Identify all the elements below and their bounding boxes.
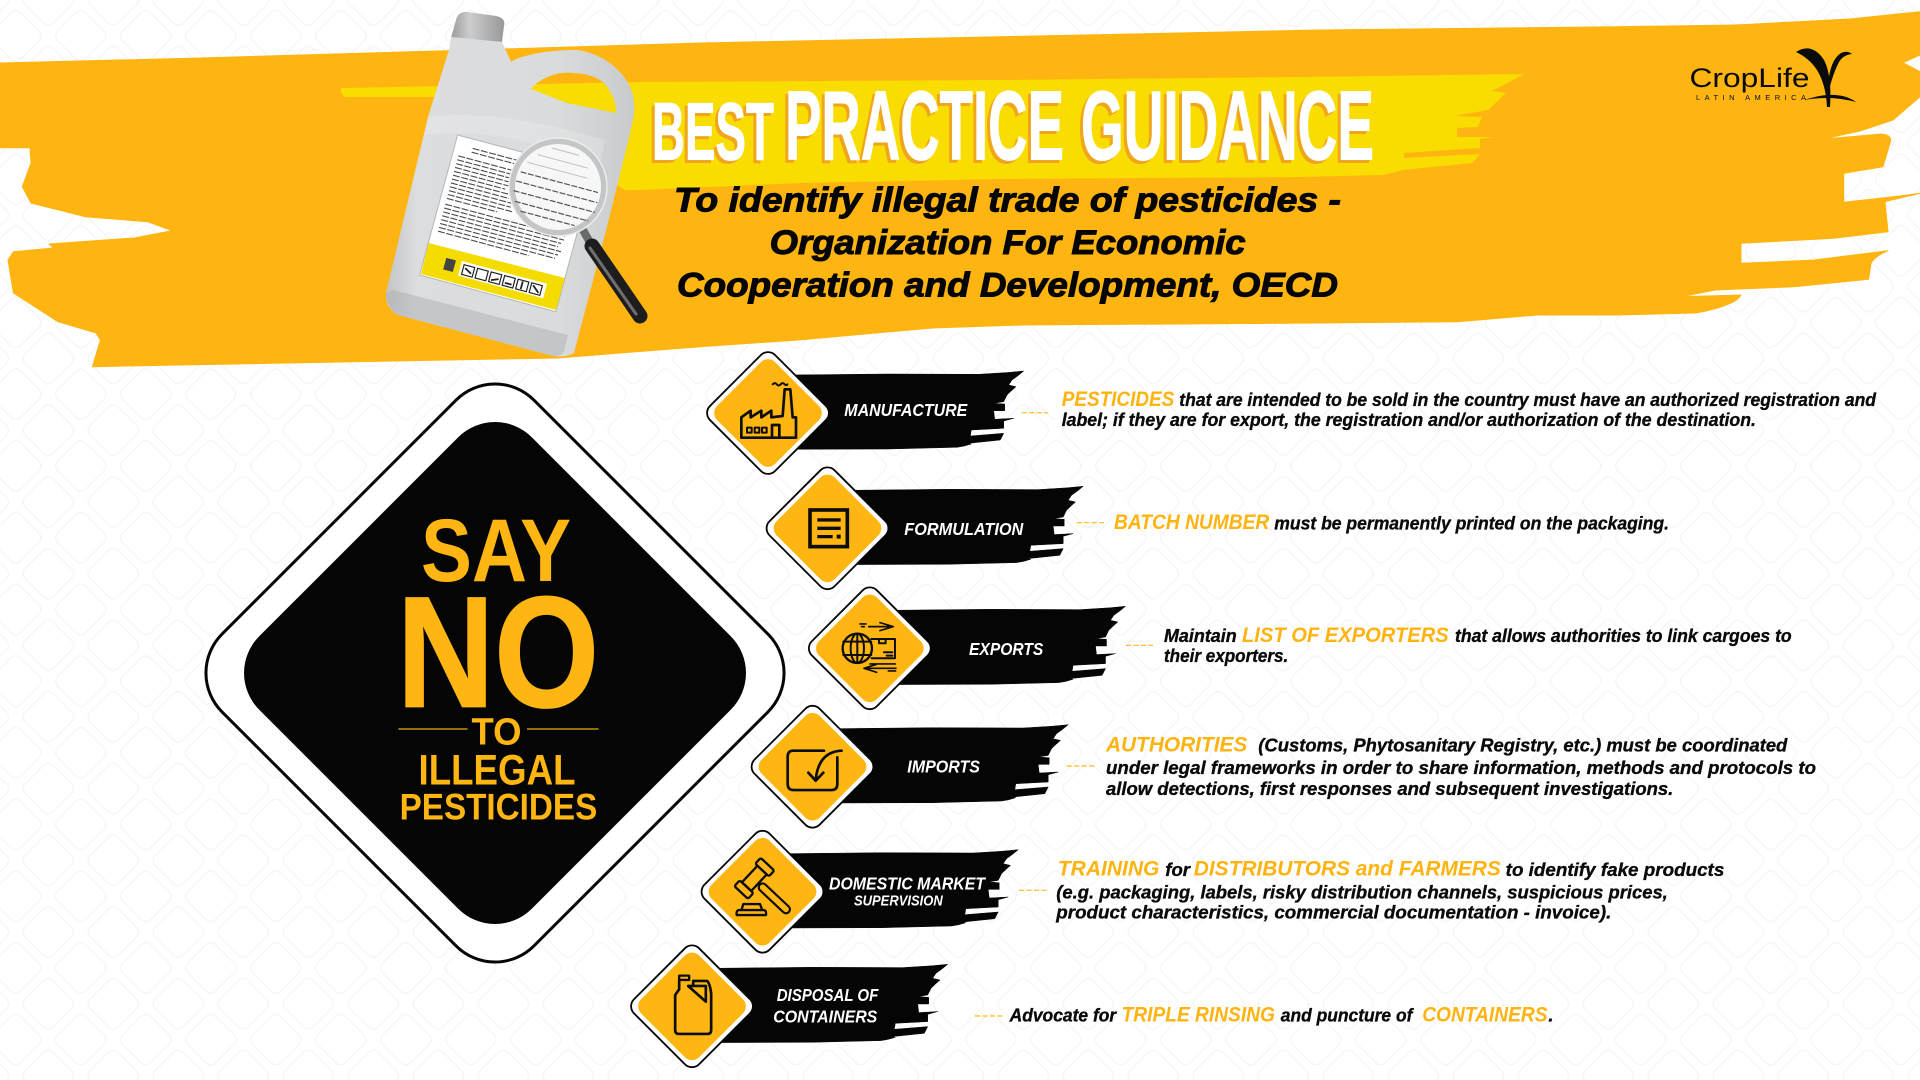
label: domestic market supervision: SUPERVISION [854, 893, 943, 909]
description: batch number: must be permanently printed on the packaging. [1274, 512, 1669, 533]
icon: import tray [788, 751, 842, 790]
description: list of exporters: their exporters. [1164, 645, 1288, 666]
label pictograms [443, 257, 547, 298]
subtitle: Cooperation and Development, OECD [677, 267, 1338, 305]
description: pesticides: that are intended to be sold in the country must have an authorized registration and [1179, 389, 1877, 410]
title: BEST [652, 86, 774, 177]
description: list of exporters: Maintain [1164, 625, 1237, 646]
sign text: NO [397, 565, 599, 741]
label yellow band [421, 243, 565, 310]
jug cap [451, 12, 504, 42]
magnifier handle [583, 230, 593, 248]
row: domestic market supervision [697, 827, 1724, 957]
sign black panel [222, 400, 768, 946]
logo seedling [1796, 48, 1856, 107]
description: list of exporters: LIST OF EXPORTERS [1242, 624, 1449, 647]
row: manufacture [703, 348, 1877, 478]
description: training: for [1165, 859, 1192, 880]
jug shading [424, 115, 605, 165]
subtitle [674, 182, 1341, 305]
title: GUIDANCE [1081, 70, 1374, 180]
label text lines [438, 145, 581, 263]
description: authorities: (Customs, Phytosanitary Registry, etc.) must be coordinated [1258, 735, 1788, 756]
magnifier [509, 138, 640, 316]
warning sign: say no to illegal pesticides [183, 361, 807, 985]
description: authorities: AUTHORITIES [1105, 734, 1247, 757]
sign text: SAY [421, 500, 571, 600]
label: domestic market supervision: DOMESTIC MARKET [829, 873, 987, 893]
icon: globe and parcel [843, 623, 896, 672]
description: triple rinsing: CONTAINERS [1422, 1004, 1548, 1027]
description: training: (e.g. packaging, labels, risky distribution channels, suspicious prices, [1056, 881, 1668, 902]
label: exports: EXPORTS [969, 639, 1043, 659]
row: imports [747, 702, 1816, 832]
icon: factory [741, 383, 796, 438]
description: triple rinsing: TRIPLE RINSING [1122, 1004, 1275, 1027]
label: domestic market supervision [829, 873, 987, 909]
icon: container [675, 976, 711, 1034]
description: training: TRAINING [1058, 858, 1159, 881]
magnifier lens [512, 141, 604, 233]
label: disposal of containers: DISPOSAL OF [777, 985, 879, 1005]
title [652, 70, 1374, 180]
description: authorities [1105, 734, 1816, 799]
description: triple rinsing: and puncture of [1281, 1005, 1414, 1026]
description: pesticides: PESTICIDES [1062, 388, 1174, 411]
icon: gavel [734, 858, 786, 915]
jug label [420, 135, 594, 312]
description: training: to identify fake products [1506, 859, 1724, 880]
sign text [397, 500, 599, 827]
description: authorities: allow detections, first responses and subsequent investigations. [1106, 778, 1673, 799]
description: triple rinsing: . [1548, 1005, 1554, 1026]
label: manufacture: MANUFACTURE [844, 400, 968, 420]
description: training: product characteristics, commercial documentation - invoice). [1055, 901, 1611, 922]
description: training: DISTRIBUTORS and FARMERS [1194, 858, 1501, 881]
description: batch number [1114, 511, 1669, 534]
logo: CropLife Latin America [1690, 48, 1856, 107]
description: triple rinsing [1009, 1004, 1554, 1027]
icon: document [810, 510, 847, 547]
sign text: PESTICIDES [400, 786, 597, 827]
description: pesticides [1062, 388, 1877, 430]
header brush banner [0, 12, 1920, 367]
sign text: TO [472, 711, 522, 753]
label: disposal of containers [773, 985, 879, 1026]
yellow highlight brush behind title [341, 74, 1524, 190]
label: formulation: FORMULATION [904, 519, 1024, 539]
row: exports [805, 583, 1792, 713]
description: triple rinsing: Advocate for [1009, 1005, 1118, 1026]
description: list of exporters: that allows authorities to link cargoes to [1455, 625, 1792, 646]
description: pesticides: label; if they are for export, the registration and/or authorization of the destination. [1062, 409, 1756, 430]
label: disposal of containers: CONTAINERS [773, 1006, 877, 1026]
description: list of exporters [1164, 624, 1792, 666]
sign text: ILLEGAL [418, 746, 576, 794]
row: disposal of containers [627, 941, 1554, 1071]
sign outer border [183, 361, 807, 985]
label: imports: IMPORTS [907, 756, 980, 776]
title: PRACTICE [785, 70, 1064, 180]
jug body [386, 37, 634, 357]
subtitle: To identify illegal trade of pesticides - [674, 182, 1341, 220]
logo: CropLife Latin America: LATIN AMERICA [1696, 93, 1806, 102]
description: training [1055, 858, 1724, 922]
jug base shading [386, 290, 568, 356]
description: authorities: under legal frameworks in order to share information, methods and protocols to [1106, 757, 1816, 778]
subtitle: Organization For Economic [770, 224, 1246, 262]
row: formulation [762, 463, 1669, 593]
lens magnified text [509, 141, 608, 230]
illustration: pesticide jug with magnifier [386, 12, 640, 357]
description: batch number: BATCH NUMBER [1114, 511, 1270, 534]
logo: CropLife Latin America: CropLife [1690, 63, 1810, 93]
